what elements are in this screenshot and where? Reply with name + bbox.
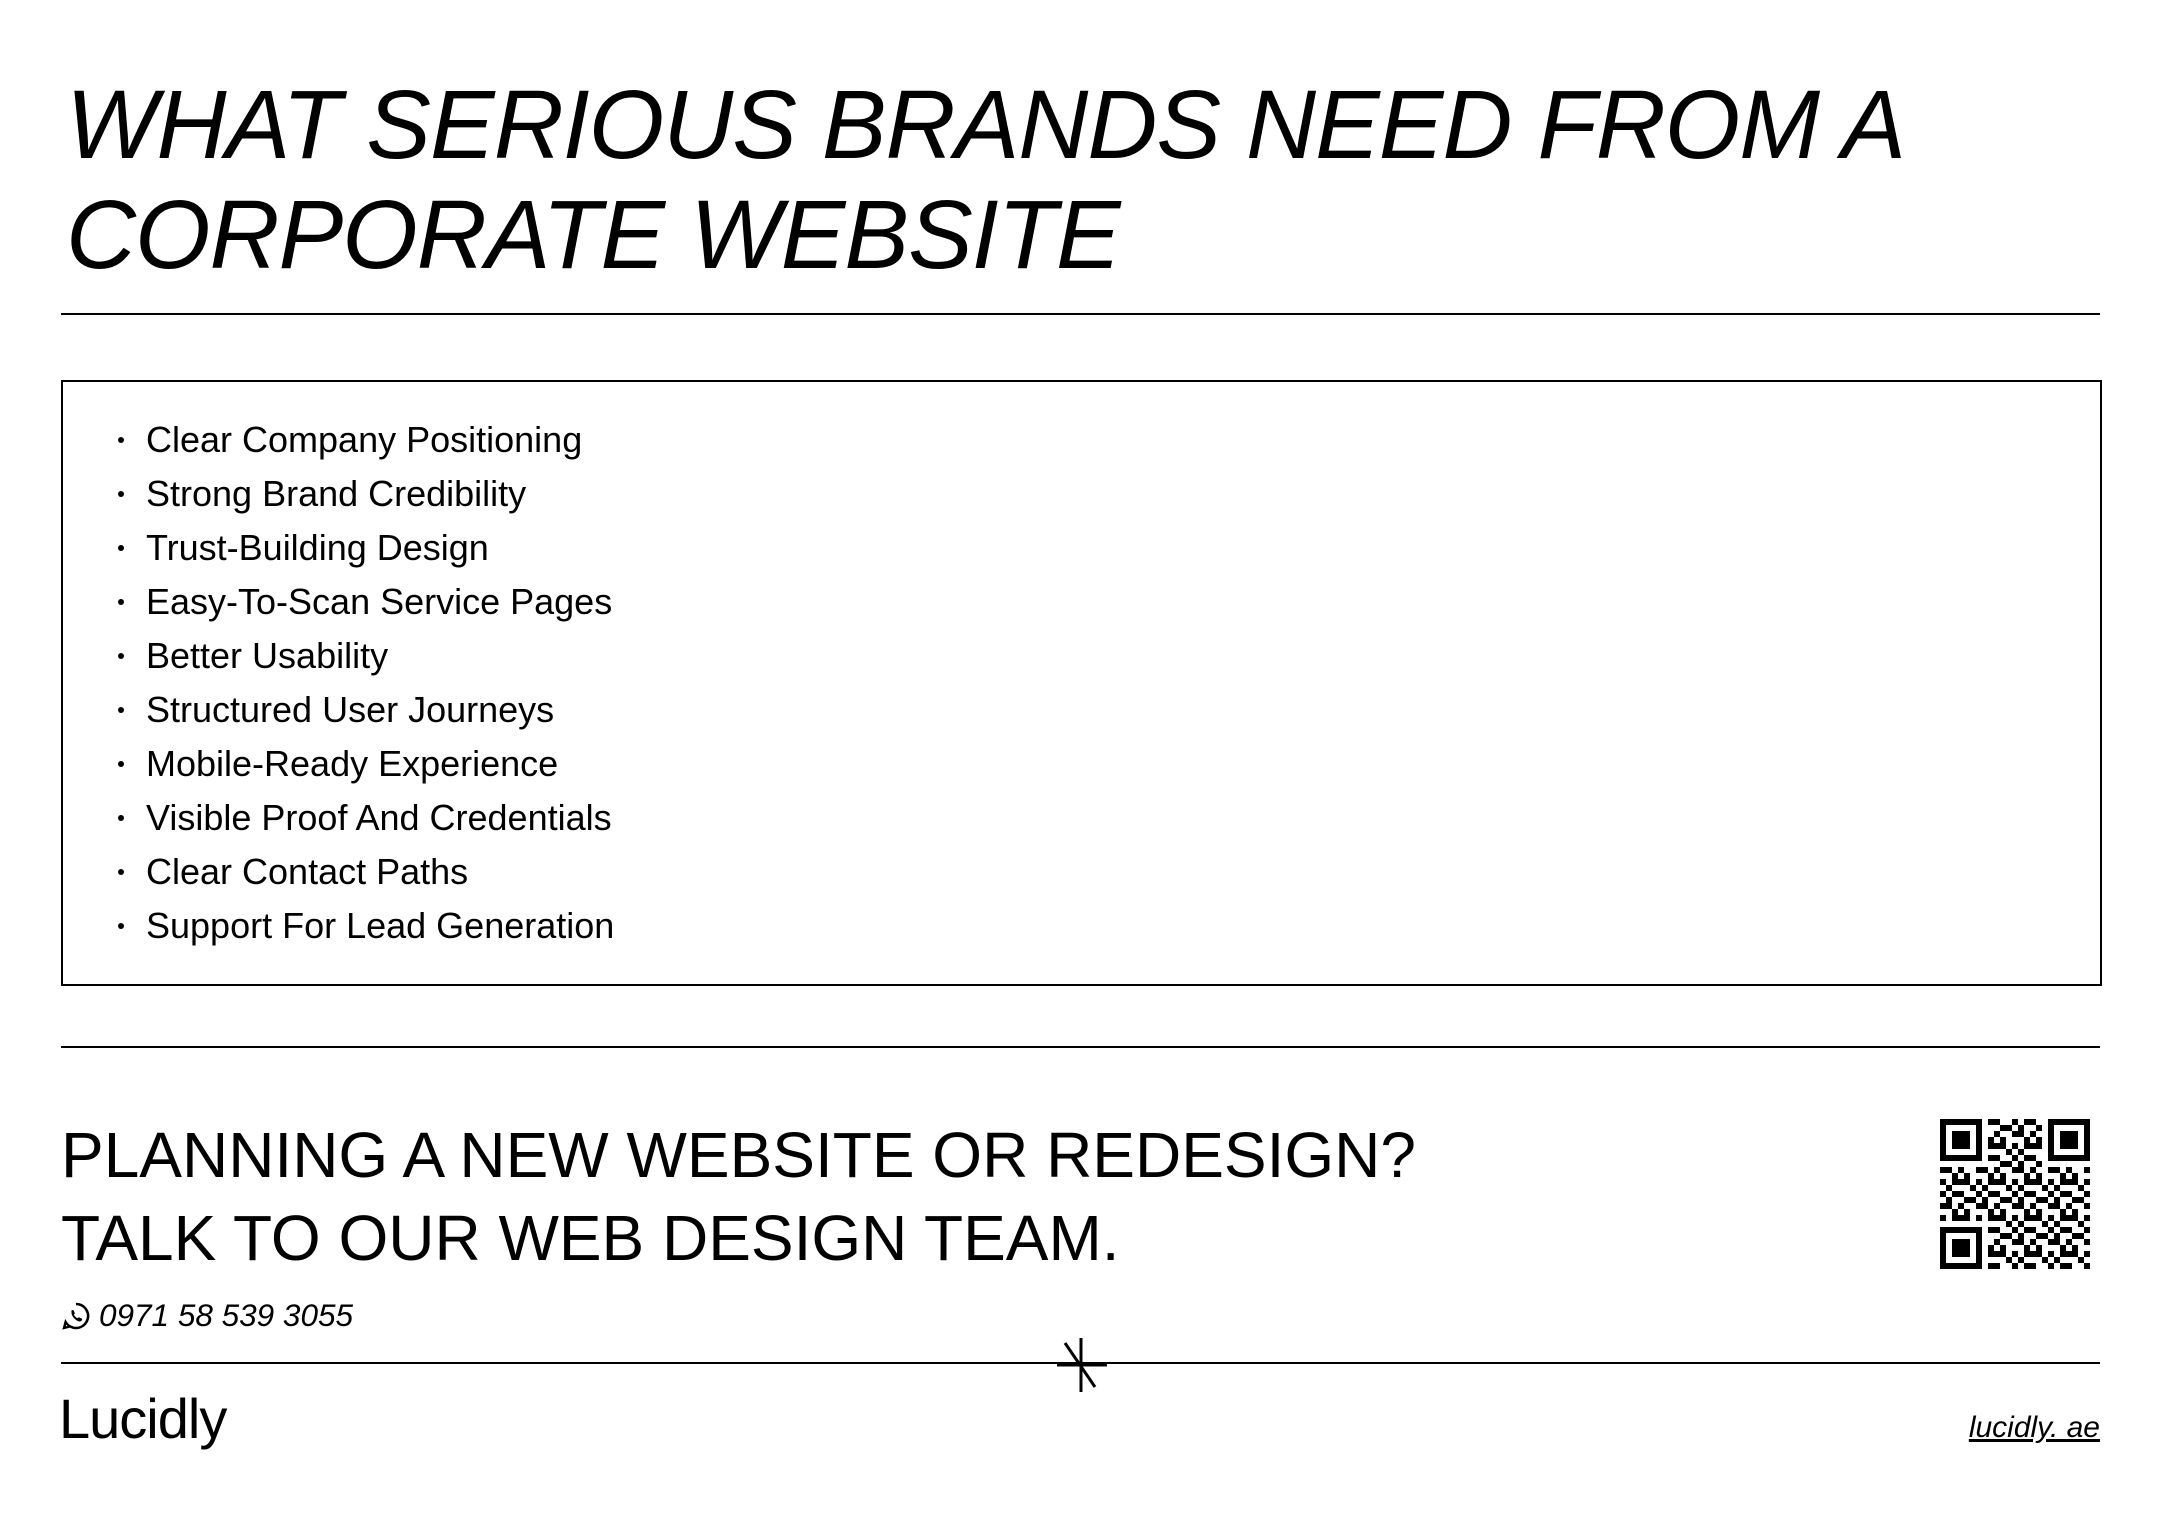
bullet list: Mobile-Ready Experience	[146, 743, 558, 784]
website link: lucidly. ae	[1969, 1411, 2100, 1444]
bullet list: Better Usability	[146, 635, 388, 676]
QR code	[1940, 1119, 2090, 1269]
phone contact: 0971 58 539 3055	[99, 1297, 353, 1333]
bullet list: Strong Brand Credibility	[146, 473, 526, 514]
bullet list: Clear Contact Paths	[146, 851, 468, 892]
title: CORPORATE WEBSITE	[66, 180, 1120, 289]
bullet list: Clear Company Positioning	[146, 419, 582, 460]
logo: Lucidly	[59, 1387, 226, 1450]
bullet list: Support For Lead Generation	[146, 905, 614, 946]
icon: star cross	[1057, 1338, 1107, 1392]
bullet list: Trust-Building Design	[146, 527, 489, 568]
bullet list: Easy-To-Scan Service Pages	[146, 581, 612, 622]
call to action heading: PLANNING A NEW WEBSITE OR REDESIGN?	[61, 1119, 1416, 1191]
bullet list: Structured User Journeys	[146, 689, 554, 730]
bullet list	[118, 419, 614, 946]
panel: requirements list	[61, 380, 2102, 986]
bullet list: Visible Proof And Credentials	[146, 797, 612, 838]
call to action heading: TALK TO OUR WEB DESIGN TEAM.	[61, 1202, 1120, 1274]
title: WHAT SERIOUS BRANDS NEED FROM A	[66, 70, 1905, 179]
call to action heading	[61, 1119, 1416, 1274]
title	[66, 70, 1905, 289]
